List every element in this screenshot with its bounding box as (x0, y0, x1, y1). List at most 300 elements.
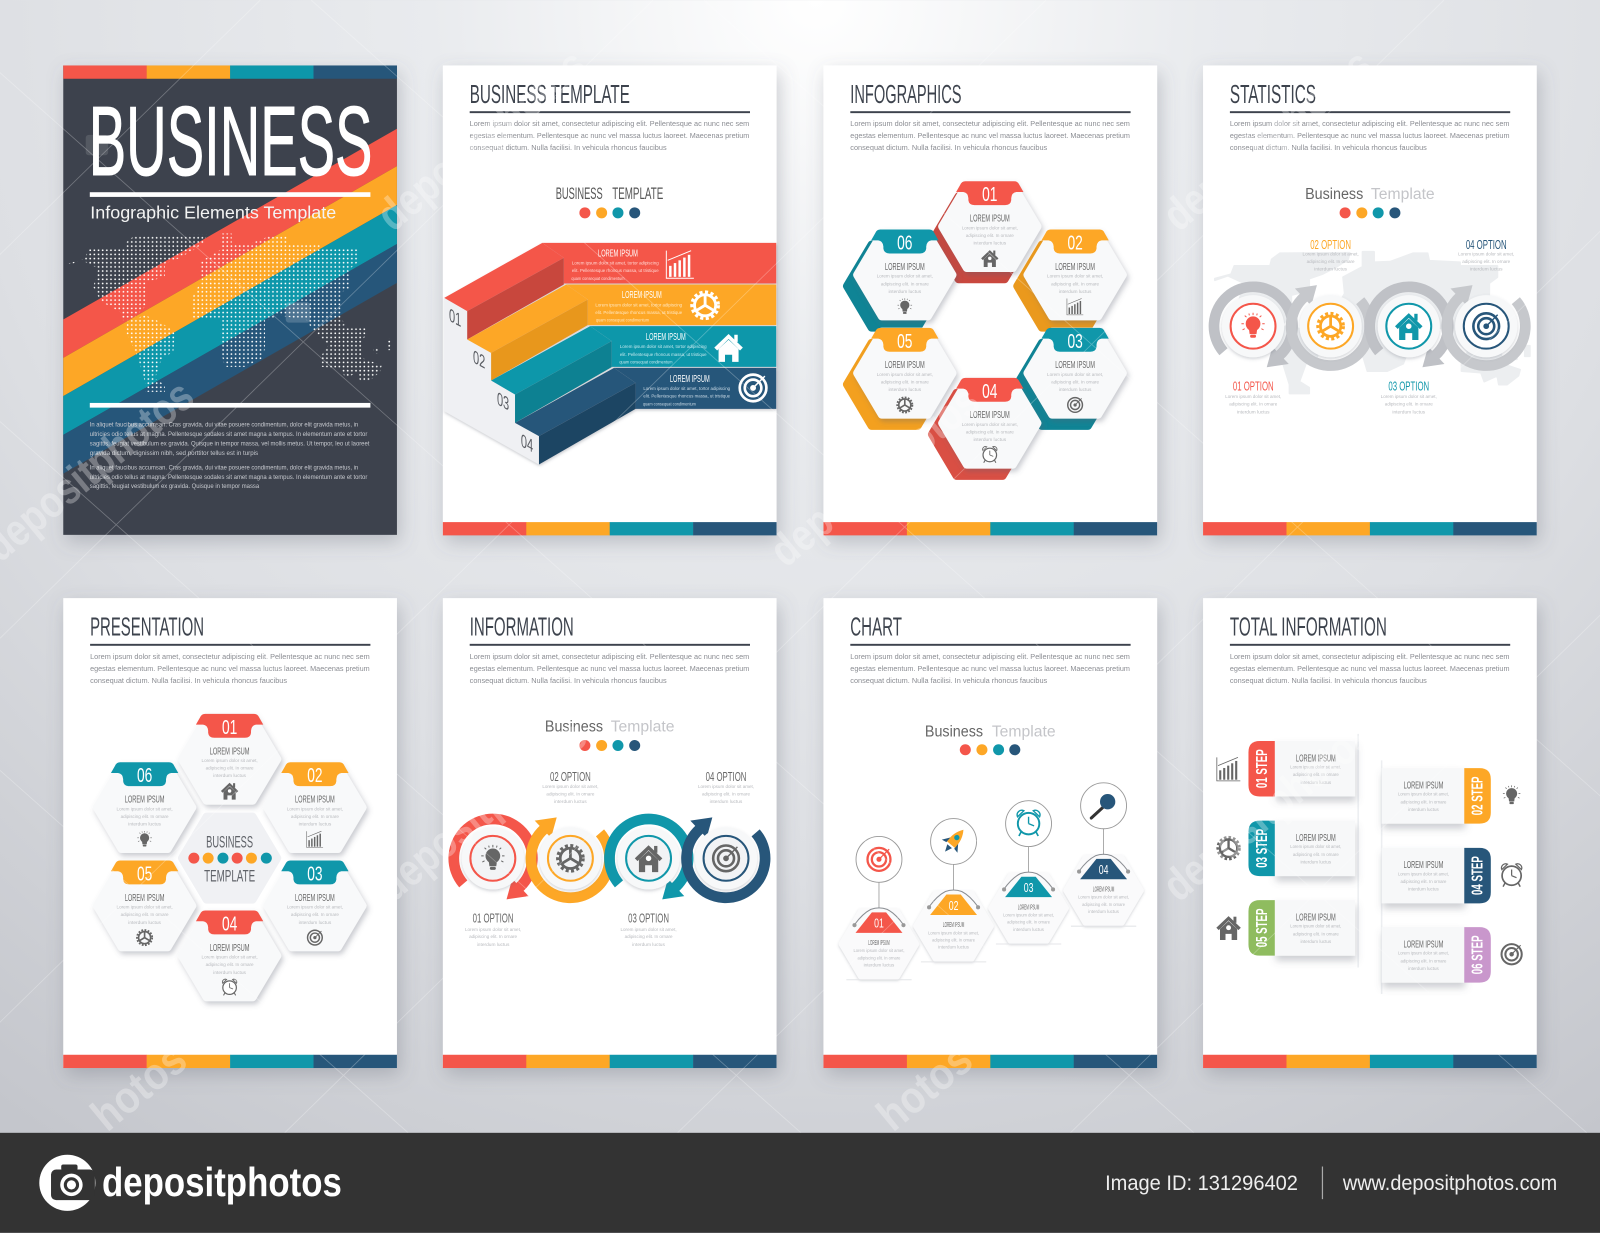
band 2 text: elit. Pellentesque rhoncus massa, ut tristique (595, 310, 683, 315)
cover body text: In aliquet faucibus accumsan. Cras gravida, dui vitae posuere condimentum, dolor elit gravida metus, in (90, 465, 358, 472)
hexagon 03: LOREM IPSUM (1055, 360, 1095, 371)
cover rule top (90, 192, 370, 197)
hexagon 05 (847, 328, 952, 426)
subheading: Template (992, 724, 1056, 741)
panel sheet (443, 598, 777, 1068)
website: www.depositphotos.com (1342, 1172, 1557, 1195)
cover body text: In aliquet faucibus accumsan. Cras gravida, dui vitae posuere condimentum, dolor elit gravida metus, in (90, 422, 358, 429)
label 04 option: interdum luctus (710, 799, 743, 804)
step 04: interdum luctus (1088, 909, 1120, 914)
step 02 card: adipiscing elit. In ornare (1401, 799, 1447, 804)
hexagon 03: 03 (307, 863, 323, 885)
cover subtitle: Infographic Elements Template (90, 203, 336, 223)
heading rule (1230, 644, 1510, 646)
hexagon 01: adipiscing elit. In ornare (966, 233, 1014, 238)
cover title: BUSINESS (89, 86, 372, 196)
step 04: Lorem ipsum dolor sit amet, (1078, 895, 1129, 900)
watermarks: depositphotos (367, 709, 596, 911)
label 01 option: Lorem ipsum dolor sit amet, (465, 927, 521, 932)
step 01 card: Lorem ipsum dolor sit amet, (1290, 765, 1341, 770)
step 03 card: Lorem ipsum dolor sit amet, (1290, 844, 1341, 849)
step 01: Lorem ipsum dolor sit amet, (853, 948, 904, 953)
hexagon 03: adipiscing elit. In ornare (291, 912, 339, 917)
hexagon 04 (932, 378, 1037, 476)
band 1 text (571, 248, 659, 281)
step 03 card: LOREM IPSUM (1296, 833, 1336, 844)
hexagon 04: 04 (982, 381, 997, 403)
intro text: egestas elementum. Pellentesque ac nunc vel massa luctus laoreet. Maecenas pretium (470, 664, 749, 673)
hexagon 03: 03 (1067, 331, 1083, 353)
panel sheet (823, 598, 1157, 1068)
bottom colour bar (63, 1055, 397, 1068)
intro text: consequat dictum. Nulla facilisi. In vehicula rhoncus faucibus (90, 676, 287, 685)
panel sheet (63, 598, 397, 1068)
step 01: LOREM IPSUM (868, 939, 890, 947)
bottom colour bar (443, 1055, 777, 1068)
hexagon 06: Lorem ipsum dolor sit amet, (117, 806, 173, 811)
label 03 option: interdum luctus (1392, 409, 1426, 414)
cover body text (90, 422, 369, 490)
step 04 card: Lorem ipsum dolor sit amet, (1398, 871, 1449, 876)
step 04: adipiscing elit. In ornare (1082, 902, 1125, 907)
label 04 option: adipiscing elit. In ornare (1462, 259, 1511, 264)
hexagon 06: adipiscing elit. In ornare (881, 281, 929, 286)
bottom colour bar (823, 522, 1157, 535)
hexagon 03: interdum luctus (299, 920, 332, 925)
step 02 card: interdum luctus (1408, 807, 1440, 812)
stair numbers: 02 (473, 347, 485, 374)
label 03 option: 03 OPTION (1388, 378, 1429, 393)
band 2 text: quam consequat condimentum (596, 318, 649, 323)
band 1 text: Lorem ipsum dolor sit amet, tortor adipiscing (572, 260, 659, 265)
hexagon 05: LOREM IPSUM (885, 360, 925, 371)
heading rule (1230, 111, 1510, 113)
stair numbers: 04 (521, 430, 533, 457)
panel: presentation (63, 598, 397, 1068)
panel: chart (823, 598, 1157, 1068)
step 06 card: adipiscing elit. In ornare (1401, 958, 1447, 963)
step 05 card: 05 STEP (1254, 909, 1271, 947)
step 01: interdum luctus (864, 962, 895, 967)
step 01 card: adipiscing elit. In ornare (1293, 772, 1339, 777)
label 04 option: 04 OPTION (1466, 237, 1507, 252)
hexagon 05 (97, 860, 192, 947)
hexagon 04: 04 (222, 913, 237, 935)
label 01 option: interdum luctus (477, 942, 510, 947)
band 2 text: LOREM IPSUM (622, 290, 662, 301)
hexagon 06: interdum luctus (128, 822, 162, 827)
option 3 icon (1378, 295, 1440, 357)
option 2 icon (539, 827, 602, 889)
band 3 text: elit. Pellentesque rhoncus massa, ut tristique (620, 352, 707, 357)
step 02 card: Lorem ipsum dolor sit amet, (1398, 792, 1449, 797)
intro text: Lorem ipsum dolor sit amet, consectetur adipiscing elit. Pellentesque ac nunc nec sem (90, 652, 370, 661)
watermarks: hotos (867, 1033, 982, 1141)
step 04 (1066, 783, 1141, 926)
step 02 card (1382, 768, 1491, 824)
step 04 card: 04 STEP (1470, 856, 1487, 895)
step 02 (916, 819, 991, 962)
intro text: egestas elementum. Pellentesque ac nunc vel massa luctus laoreet. Maecenas pretium (1230, 664, 1509, 673)
centre hexagon: TEMPLATE (204, 868, 255, 886)
step 03 card: 03 STEP (1254, 829, 1271, 868)
watermarks: depositphotos (1152, 709, 1382, 911)
hexagon 05: adipiscing elit. In ornare (881, 380, 929, 385)
intro text: Lorem ipsum dolor sit amet, consectetur adipiscing elit. Pellentesque ac nunc nec sem (470, 119, 749, 128)
hexagon 05: 05 (137, 863, 152, 885)
panel: cover (63, 65, 397, 535)
step 05 card (1248, 900, 1355, 956)
panel: information (443, 598, 777, 1068)
image id: Image ID: 131296402 (1105, 1172, 1298, 1195)
icon: gear (692, 292, 718, 319)
band 2 text: Lorem ipsum dolor sit amet, tortor adipiscing (595, 302, 683, 307)
hexagon 05: interdum luctus (128, 920, 162, 925)
label 04 option: Lorem ipsum dolor sit amet, (698, 784, 754, 789)
subheading (1305, 186, 1435, 203)
step 01 card: LOREM IPSUM (1296, 753, 1336, 764)
hexagon 06 (847, 230, 952, 328)
step 02: interdum luctus (938, 945, 970, 950)
label 04 option: 04 OPTION (706, 769, 746, 784)
hexagon 04: LOREM IPSUM (210, 943, 249, 954)
bottom colour bar (823, 1055, 1157, 1068)
step 04: 04 (1099, 862, 1108, 877)
watermarks: depositphotos (367, 39, 596, 241)
subheading: BUSINESS (556, 185, 603, 203)
hexagon 01: 01 (222, 717, 237, 739)
subheading: Business (1305, 186, 1364, 203)
hexagon 03: Lorem ipsum dolor sit amet, (287, 905, 343, 910)
hexagon 05: adipiscing elit. In ornare (121, 912, 169, 917)
option 2 icon (1299, 295, 1362, 357)
step 03 card (1248, 821, 1355, 876)
hexagon 02: Lorem ipsum dolor sit amet, (1047, 274, 1103, 279)
step 02: LOREM IPSUM (943, 921, 964, 929)
label 01 option: Lorem ipsum dolor sit amet, (1225, 394, 1281, 399)
step 03: adipiscing elit. In ornare (1007, 920, 1050, 925)
panel sheet (823, 65, 1157, 535)
icon: target (740, 375, 766, 401)
band 2 text (595, 290, 683, 323)
step 02 card: 02 STEP (1470, 777, 1487, 815)
step 02 card: LOREM IPSUM (1404, 781, 1443, 792)
label 02 option: interdum luctus (554, 799, 588, 804)
hexagon 02: LOREM IPSUM (1055, 262, 1095, 273)
hexagon 02: LOREM IPSUM (295, 795, 335, 806)
band 3 text: Lorem ipsum dolor sit amet, tortor adipiscing (620, 344, 707, 349)
intro text: Lorem ipsum dolor sit amet, consectetur adipiscing elit. Pellentesque ac nunc nec sem (850, 652, 1130, 661)
hexagon 02: interdum luctus (299, 822, 332, 827)
four dots (1340, 207, 1400, 218)
intro text: egestas elementum. Pellentesque ac nunc vel massa luctus laoreet. Maecenas pretium (470, 131, 749, 140)
label 01 option: 01 OPTION (1233, 378, 1274, 393)
hexagon 05: Lorem ipsum dolor sit amet, (877, 372, 933, 377)
four dots (579, 207, 640, 218)
step 04 card: LOREM IPSUM (1404, 860, 1443, 871)
label 03 option (621, 911, 677, 947)
grey world map (1215, 252, 1530, 394)
hexagon 01 (182, 714, 277, 801)
hexagon 06: LOREM IPSUM (885, 262, 925, 273)
band 3 text: LOREM IPSUM (646, 332, 686, 343)
label 01 option (465, 911, 521, 947)
intro text: consequat dictum. Nulla facilisi. In vehicula rhoncus faucibus (1230, 676, 1427, 685)
band 1 text: elit. Pellentesque rhoncus massa, ut tristique (572, 268, 659, 273)
intro text: consequat dictum. Nulla facilisi. In vehicula rhoncus faucibus (850, 676, 1047, 685)
hexagon 06: adipiscing elit. In ornare (121, 814, 169, 819)
label 01 option: 01 OPTION (473, 911, 513, 926)
icon: bulb (1503, 785, 1520, 804)
logo mark (39, 1155, 95, 1211)
hexagon 04: adipiscing elit. In ornare (206, 962, 254, 967)
label 04 option (1458, 237, 1514, 272)
step 04 card: interdum luctus (1408, 887, 1440, 892)
icon: chart (1217, 757, 1240, 781)
watermarks: hotos (81, 1033, 196, 1141)
panel: statistics (1203, 65, 1537, 535)
heading rule (850, 644, 1131, 646)
step 01 (842, 836, 916, 980)
label 02 option: Lorem ipsum dolor sit amet, (1303, 251, 1359, 256)
intro text (850, 652, 1130, 685)
intro text (1230, 652, 1509, 685)
hexagon 01: LOREM IPSUM (970, 214, 1010, 225)
cover rule bottom (90, 403, 370, 408)
heading: CHART (850, 613, 902, 641)
label 04 option: Lorem ipsum dolor sit amet, (1458, 251, 1514, 256)
hexagon 04: Lorem ipsum dolor sit amet, (962, 422, 1018, 427)
bottom colour bar (1203, 1055, 1537, 1068)
stair numbers: 01 (449, 305, 461, 332)
hexagon 02 (267, 762, 362, 849)
panel sheet (443, 65, 777, 535)
panel sheet (1203, 598, 1537, 1068)
cover body text: gravida dictum, dignissim nibh, sed porttitor tellus est in turpis (90, 450, 259, 457)
intro text: Lorem ipsum dolor sit amet, consectetur adipiscing elit. Pellentesque ac nunc nec sem (1230, 652, 1509, 661)
hexagon 02: interdum luctus (1059, 289, 1092, 294)
stair numbers: 03 (497, 388, 509, 415)
icon: chart (666, 251, 694, 278)
step 01: 01 (874, 916, 884, 931)
label 03 option: Lorem ipsum dolor sit amet, (1381, 394, 1437, 399)
watermarks: depositphotos (760, 375, 989, 576)
intro text: Lorem ipsum dolor sit amet, consectetur adipiscing elit. Pellentesque ac nunc nec sem (850, 119, 1130, 128)
step 06 card (1382, 927, 1491, 983)
step 02: 02 (949, 898, 958, 913)
hexagon 02: 02 (1067, 233, 1083, 255)
hexagon 04: adipiscing elit. In ornare (966, 430, 1014, 435)
icon: gear (1218, 837, 1239, 859)
hexagon 03 (267, 860, 362, 947)
band 4 text: LOREM IPSUM (670, 374, 710, 385)
label 04 option: interdum luctus (1470, 267, 1503, 272)
step 05 card: interdum luctus (1301, 939, 1332, 944)
step 04: LOREM IPSUM (1093, 886, 1114, 894)
hexagon 02 (1017, 230, 1123, 328)
intro text (90, 652, 370, 685)
band 4 text: quam consequat condimentum (643, 401, 696, 406)
four dots (960, 744, 1020, 755)
band 3 text: quam consequat condimentum (619, 359, 673, 364)
hexagon 01: interdum luctus (213, 773, 247, 778)
band 1 text: quam consequat condimentum (571, 276, 625, 281)
hexagon 06: 06 (897, 233, 912, 255)
hexagon 04: interdum luctus (213, 970, 247, 975)
hexagon 04: LOREM IPSUM (970, 410, 1010, 421)
option 3 icon (617, 827, 680, 889)
option 1 icon (1222, 295, 1284, 357)
band 4 text (643, 374, 731, 406)
hexagon 03 (1017, 328, 1123, 426)
step 03: LOREM IPSUM (1018, 903, 1039, 911)
subheading: Business (545, 718, 603, 735)
heading: STATISTICS (1230, 81, 1316, 109)
step 01 card: 01 STEP (1254, 749, 1271, 788)
step 02: adipiscing elit. In ornare (932, 938, 975, 943)
label 01 option (1225, 378, 1281, 414)
icon: target (1502, 944, 1522, 964)
step 03 card: interdum luctus (1301, 859, 1332, 864)
icon: house (714, 334, 743, 362)
centre hexagon: BUSINESS (206, 834, 253, 852)
icon: clock (1502, 864, 1522, 887)
panel: total information (1203, 598, 1537, 1068)
label 04 option: adipiscing elit. In ornare (702, 792, 751, 797)
hexagon 04: Lorem ipsum dolor sit amet, (202, 955, 258, 960)
hexagon 02: Lorem ipsum dolor sit amet, (287, 806, 343, 811)
circular arrows (454, 817, 765, 899)
step 03: 03 (1024, 880, 1033, 895)
hexagon 01: adipiscing elit. In ornare (206, 766, 254, 771)
heading: BUSINESS TEMPLATE (470, 81, 630, 109)
label 02 option: 02 OPTION (1310, 237, 1351, 252)
bottom colour bar (1203, 522, 1537, 535)
hexagon 06: LOREM IPSUM (125, 795, 164, 806)
hexagon 01: interdum luctus (973, 241, 1007, 246)
cover body text: sagittis, feugiat vestibulum ex gravida. Quisque in tempor massa, vel mollis metus. Ut tempor, leo ut laoreet (90, 440, 369, 447)
intro text: consequat dictum. Nulla facilisi. In vehicula rhoncus faucibus (470, 143, 667, 152)
subheading: Business (925, 724, 983, 741)
hexagon 03: Lorem ipsum dolor sit amet, (1047, 372, 1103, 377)
hexagon 05: 05 (897, 331, 912, 353)
label 02 option: interdum luctus (1314, 267, 1348, 272)
hexagon 03: adipiscing elit. In ornare (1051, 380, 1100, 385)
hexagon 03: interdum luctus (1059, 387, 1092, 392)
footer bar (0, 1133, 1600, 1233)
step 01 card: interdum luctus (1301, 780, 1332, 785)
intro text: egestas elementum. Pellentesque ac nunc vel massa luctus laoreet. Maecenas pretium (1230, 131, 1509, 140)
hexagon 01: LOREM IPSUM (210, 746, 249, 757)
subheading: Template (1371, 186, 1435, 203)
intro text: consequat dictum. Nulla facilisi. In vehicula rhoncus faucibus (1230, 143, 1427, 152)
hexagon 01: Lorem ipsum dolor sit amet, (202, 758, 258, 763)
hexagon 01 (934, 181, 1037, 279)
hexagon 04 (182, 910, 277, 997)
hexagon 05: interdum luctus (888, 387, 922, 392)
hexagon 02: adipiscing elit. In ornare (291, 814, 339, 819)
hexagon 01: 01 (982, 184, 997, 206)
label 03 option (1381, 378, 1437, 414)
intro text (470, 652, 749, 685)
band 4 text: elit. Pellentesque rhoncus massa, ut tristique (643, 394, 731, 399)
label 03 option: adipiscing elit. In ornare (625, 934, 673, 939)
intro text: Lorem ipsum dolor sit amet, consectetur adipiscing elit. Pellentesque ac nunc nec sem (1230, 119, 1509, 128)
label 02 option (542, 769, 598, 804)
label 03 option: Lorem ipsum dolor sit amet, (621, 927, 677, 932)
label 02 option: 02 OPTION (550, 769, 591, 784)
band 4 text: Lorem ipsum dolor sit amet, tortor adipiscing (643, 386, 731, 391)
step 03 (991, 801, 1066, 944)
label 02 option (1303, 237, 1359, 272)
cover body text: ultricies odio tellus at magna. Pellentesque sodales sit amet magna a tempus. In elementum ante et tortor (90, 431, 368, 438)
band 3 text (619, 332, 707, 364)
step 01 card (1248, 741, 1355, 796)
option 4 icon (1455, 295, 1517, 357)
heading rule (470, 644, 750, 646)
step 03: interdum luctus (1013, 927, 1045, 932)
bottom colour bar (443, 522, 777, 535)
intro text: egestas elementum. Pellentesque ac nunc vel massa luctus laoreet. Maecenas pretium (850, 131, 1130, 140)
intro text: egestas elementum. Pellentesque ac nunc vel massa luctus laoreet. Maecenas pretium (90, 664, 370, 673)
subheading (925, 724, 1056, 740)
option 4 icon (695, 827, 757, 889)
heading: INFOGRAPHICS (850, 81, 962, 109)
subheading (545, 718, 674, 736)
step 05 card: Lorem ipsum dolor sit amet, (1290, 924, 1341, 929)
hexagon 02: adipiscing elit. In ornare (1051, 281, 1100, 286)
hexagon 06: Lorem ipsum dolor sit amet, (877, 274, 933, 279)
hexagon 06 (97, 762, 192, 849)
heading: TOTAL INFORMATION (1230, 613, 1387, 641)
step 04 card (1382, 848, 1491, 903)
dotted world map (68, 234, 390, 392)
isometric stairs (444, 243, 776, 465)
hexagon 05: LOREM IPSUM (125, 893, 164, 904)
heading rule (90, 644, 370, 646)
intro text (470, 119, 749, 152)
heading: PRESENTATION (90, 613, 204, 641)
step 06 card: Lorem ipsum dolor sit amet, (1398, 951, 1449, 956)
four dots (579, 740, 640, 751)
hexagon 06: interdum luctus (888, 289, 922, 294)
step 04 card: adipiscing elit. In ornare (1401, 879, 1447, 884)
label 01 option: interdum luctus (1237, 409, 1270, 414)
step 01: adipiscing elit. In ornare (858, 955, 901, 960)
icon: house (1216, 916, 1241, 940)
heading rule (850, 111, 1131, 113)
cover body text: sagittis, feugiat vestibulum ex gravida. Quisque in tempor massa (90, 483, 259, 490)
label 03 option: interdum luctus (632, 942, 666, 947)
step 02: Lorem ipsum dolor sit amet, (928, 930, 979, 935)
panel sheet (1203, 65, 1537, 535)
intro text: consequat dictum. Nulla facilisi. In vehicula rhoncus faucibus (470, 676, 667, 685)
step 03 card: adipiscing elit. In ornare (1293, 852, 1339, 857)
intro text: Lorem ipsum dolor sit amet, consectetur adipiscing elit. Pellentesque ac nunc nec sem (470, 652, 749, 661)
step 05 card: adipiscing elit. In ornare (1293, 931, 1339, 936)
option 1 icon (462, 827, 524, 889)
intro text (850, 119, 1130, 152)
hexagon 06: 06 (137, 765, 152, 787)
step 05 card: LOREM IPSUM (1296, 913, 1336, 924)
hexagon 05: Lorem ipsum dolor sit amet, (117, 905, 173, 910)
subheading: TEMPLATE (612, 185, 663, 203)
step 06 card: interdum luctus (1408, 966, 1440, 971)
panel: business template (443, 65, 777, 535)
label 04 option (698, 769, 754, 804)
circular arrows (1214, 285, 1525, 367)
intro text: consequat dictum. Nulla facilisi. In vehicula rhoncus faucibus (850, 143, 1047, 152)
